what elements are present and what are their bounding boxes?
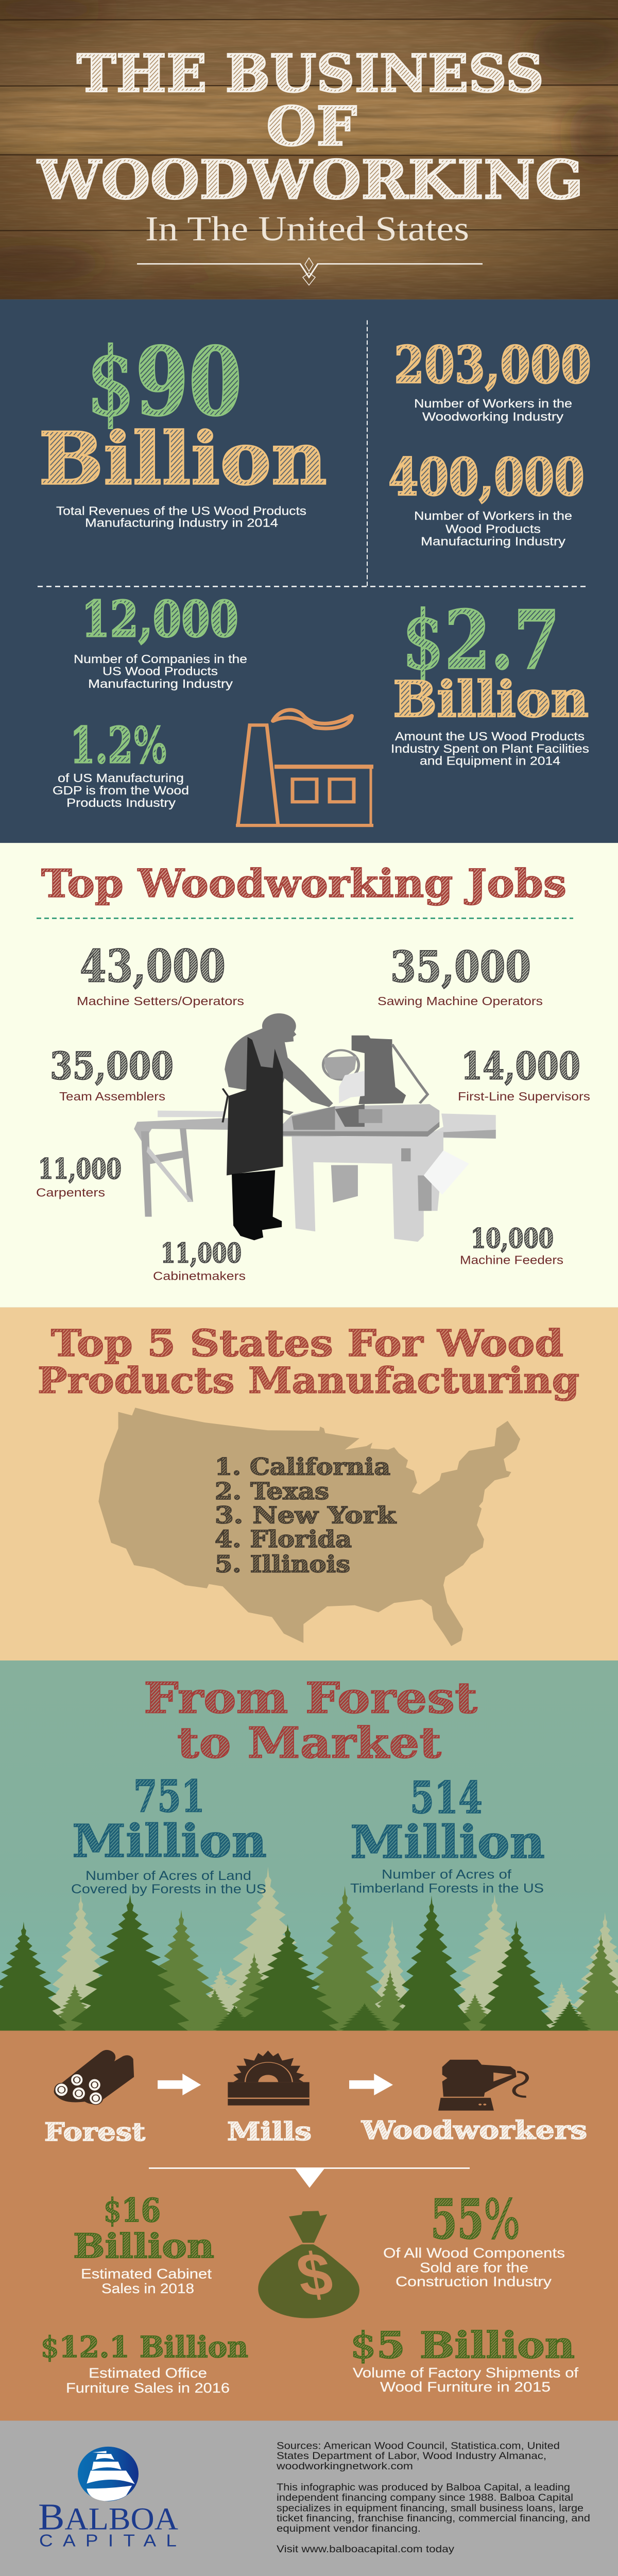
stat: $16 billion cabinet sales: Billion [73,2227,214,2266]
stat: 203,000 workers: Woodworking Industry [422,410,564,423]
stat: 55% construction: Sold are for the [420,2260,528,2276]
logo: Balboa Capital: CAPITAL [39,2531,177,2550]
list: top states: 4. Florida [215,1526,352,1553]
stat: $2.7 billion: Billion [393,670,589,728]
stat: 751 million acres: Covered by Forests in the US [71,1882,266,1896]
stat: $12.1 billion office furniture: Estimated Office [89,2366,207,2381]
stat: 12,000 companies: Number of Companies in the [74,653,247,666]
logo: Balboa Capital [38,2447,178,2550]
stat: $16 billion cabinet sales [73,2191,214,2297]
stat: 1.2% of GDP: Products Industry [66,796,176,810]
text: about Balboa Capital: equipment vendor financing. [277,2523,421,2534]
stat: 55% construction [383,2188,565,2290]
icon: sander [438,2060,527,2111]
stat: $90 billion: Billion [39,416,327,501]
stat: 12,000 companies: 12,000 [81,590,238,648]
icon: money bag: $ [291,2240,337,2309]
icon: factory [236,710,373,826]
stat: 400,000 workers: Manufacturing Industry [421,535,566,548]
stat: $2.7 billion [391,593,589,768]
list: top states: 5. Illinois [215,1551,350,1578]
stat: 203,000 workers: Number of Workers in the [414,397,572,411]
stat: $2.7 billion: $2.7 [402,593,560,687]
stat: 751 million acres [71,1771,267,1896]
stat: $12.1 billion office furniture: $12.1 Billion [41,2330,248,2364]
illustration: forest treeline [0,1867,618,2031]
subtitle: In The United States [145,209,469,248]
stat: $2.7 billion: Industry Spent on Plant Facilities [391,742,589,756]
stat: 55% construction: Construction Industry [396,2274,552,2290]
stat: 400,000 workers: Wood Products [445,522,541,536]
job: carpenters [36,1153,122,1199]
stat: $90 billion: Total Revenues of the US Wood Products [56,504,306,518]
panel: top 5 states [0,1308,618,1660]
text: about Balboa Capital: specializes in equipment financing, small business loans, large [277,2502,583,2514]
heading: from forest to market: to Market [177,1718,441,1768]
panel: footer [0,2421,618,2576]
job: team assemblers: Team Assemblers [59,1090,165,1103]
stat: 514 million acres: Number of Acres of [382,1867,512,1882]
text: about Balboa Capital: independent financing company since 1988. Balboa Capital [277,2492,573,2503]
icon: saw mill [228,2050,310,2106]
pointer: line and triangle [149,2167,470,2188]
stat: 751 million acres: 751 [133,1771,205,1822]
job: sawing machine operators: 35,000 [390,942,531,992]
stat: 400,000 workers [388,447,585,548]
job: cabinetmakers: Cabinetmakers [153,1270,246,1283]
list: top states: 1. California [215,1453,390,1481]
stat: $2.7 billion: Amount the US Wood Products [395,730,585,743]
stat: $5 billion shipments: $5 Billion [350,2324,575,2367]
logo: Balboa Capital: BALBOA [38,2496,178,2537]
job: first-line supervisors: First-Line Supervisors [458,1090,590,1103]
stat: $16 billion cabinet sales: $16 [104,2191,161,2229]
stat: $90 billion [39,327,327,530]
job: sawing machine operators: Sawing Machine Operators [377,995,543,1008]
arrow: mills to woodworkers [349,2074,393,2095]
stat: $12.1 billion office furniture: Furniture Sales in 2016 [66,2380,230,2396]
job: team assemblers: 35,000 [50,1044,174,1088]
labels: value chain: Forest [44,2118,145,2147]
stat: $5 billion shipments: Wood Furniture in 2015 [380,2379,551,2395]
stat: 55% construction: 55% [431,2188,520,2251]
heading: top woodworking jobs: Top Woodworking Jobs [41,860,566,906]
heading: from forest to market: From Forest [144,1673,477,1723]
stat: $5 billion shipments: Volume of Factory Shipments of [353,2365,578,2381]
text: about Balboa Capital: ticket financing, franchise financing, commercial financing, and [277,2513,590,2524]
stat: 12,000 companies: Manufacturing Industry [88,677,233,690]
text: about Balboa Capital: This infographic was produced by Balboa Capital, a leading [277,2482,570,2493]
list: top states [215,1453,397,1578]
stat: $5 billion shipments [350,2324,578,2395]
text: sources: Sources: American Wood Council, Statistica.com, United [277,2440,560,2451]
stat: $90 billion: Manufacturing Industry in 2014 [85,517,278,530]
job: carpenters: Carpenters [36,1187,105,1199]
heading: top 5 states: Products Manufacturing [38,1360,579,1402]
text: sources [276,2440,560,2472]
title: THE BUSINESS [77,43,544,104]
job: first-line supervisors [458,1044,590,1103]
icon: money bag [258,2211,359,2318]
panel: top woodworking jobs [0,843,618,1308]
labels: value chain: Woodworkers [361,2116,587,2145]
stat: $90 billion: $90 [87,327,242,437]
arrow: forest to mills [158,2074,201,2095]
stat: $2.7 billion: and Equipment in 2014 [420,755,560,768]
stat: 514 million acres: Timberland Forests in the US [350,1881,544,1895]
stat: 1.2% of GDP: 1.2% [70,716,167,774]
stat: 514 million acres: 514 [410,1772,483,1824]
map: United States [98,1408,520,1646]
stat: 751 million acres: Million [72,1815,267,1868]
stat: 400,000 workers: Number of Workers in the [414,510,572,523]
job: machine setters: Machine Setters/Operators [77,995,244,1008]
stat: 1.2% of GDP: of US Manufacturing [58,772,184,785]
icon: logs [54,2050,134,2105]
stat: $16 billion cabinet sales: Sales in 2018 [101,2281,194,2297]
stat: 514 million acres: Million [350,1816,545,1869]
stat: 55% construction: Of All Wood Components [383,2245,565,2261]
stat: $12.1 billion office furniture [41,2330,248,2396]
stat: 12,000 companies [74,590,247,690]
job: machine feeders: Machine Feeders [460,1254,563,1267]
job: carpenters: 11,000 [38,1153,122,1185]
panel: key statistics [0,299,618,843]
job: machine setters [77,940,244,1008]
labels: value chain: Mills [227,2117,312,2146]
job: team assemblers [50,1044,174,1103]
stat: 203,000 workers [394,335,591,423]
stat: 1.2% of GDP [53,716,189,810]
list: top states: 2. Texas [215,1478,329,1505]
stat: $16 billion cabinet sales: Estimated Cabinet [81,2266,212,2282]
job: machine setters: 43,000 [80,940,226,992]
heading: from forest to market [144,1673,477,1768]
title: WOODWORKING [37,148,583,211]
stat: 751 million acres: Number of Acres of Land [85,1868,251,1883]
illustration: worker at table saw [134,1013,496,1242]
panel: from forest to market [0,1660,618,2031]
header ornament [137,258,483,285]
heading: top 5 states [38,1322,579,1402]
job: cabinetmakers [153,1238,246,1283]
job: machine feeders [460,1223,563,1267]
job: sawing machine operators [377,942,543,1008]
labels: value chain [44,2116,587,2147]
heading: top 5 states: Top 5 States For Wood [51,1322,563,1365]
panel: market figures [0,2031,618,2421]
text: about Balboa Capital [277,2482,590,2534]
job: machine feeders: 10,000 [471,1223,554,1254]
job: cabinetmakers: 11,000 [161,1238,242,1269]
list: top states: 3. New York [215,1502,397,1529]
text: website call to action: Visit www.balboacapital.com today [277,2544,455,2555]
job: first-line supervisors: 14,000 [461,1044,580,1088]
title: OF [266,95,357,158]
panel: wood header [0,0,618,299]
title [37,43,583,211]
text: sources: woodworkingnetwork.com [276,2461,413,2472]
text: sources: States Department of Labor, Wood Industry Almanac, [277,2450,546,2462]
stat: 12,000 companies: US Wood Products [102,665,218,678]
stat: 514 million acres [350,1772,545,1895]
stat: 1.2% of GDP: GDP is from the Wood [53,784,189,798]
